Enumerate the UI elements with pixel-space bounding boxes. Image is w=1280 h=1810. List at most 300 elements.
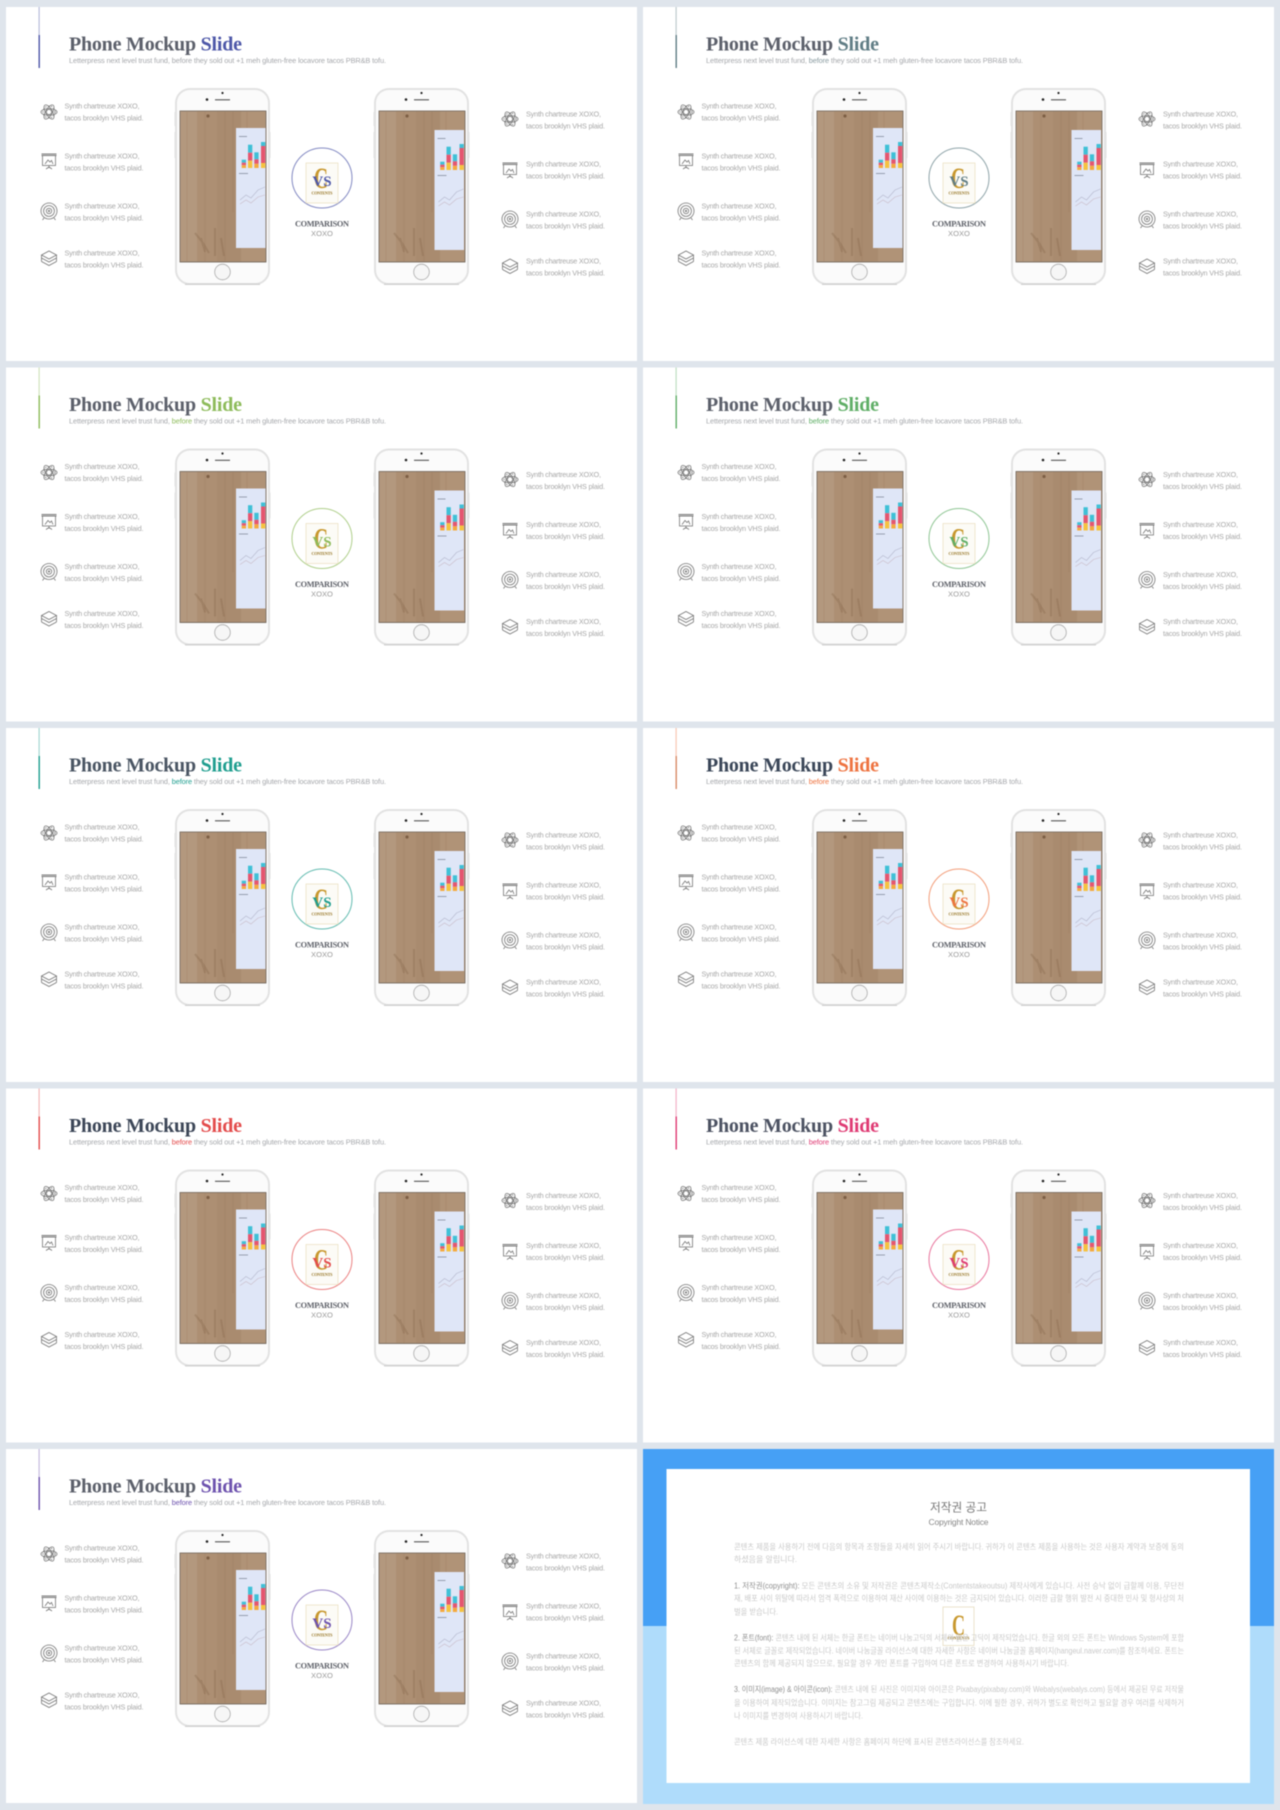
right list item 1: Synth chartreuse XOXO,: [526, 110, 601, 118]
left list item 2: tacos brooklyn VHS plaid.: [64, 1245, 144, 1254]
right list item 3: [1139, 570, 1242, 591]
left list item 3: [41, 1283, 144, 1304]
left list item 3: Synth chartreuse XOXO,: [702, 202, 776, 210]
right list item 1: Synth chartreuse XOXO,: [1163, 830, 1238, 840]
left list item 2: Synth chartreuse XOXO,: [702, 1233, 776, 1242]
VS badge: CONTENTS: [312, 551, 333, 556]
title: Phone Mockup Slide: [706, 394, 879, 416]
right list item 4: [502, 1338, 605, 1359]
right list item 2: Synth chartreuse XOXO,: [526, 1602, 601, 1610]
panel: copyright notice: [643, 1449, 1274, 1804]
left list item 4: Synth chartreuse XOXO,: [64, 609, 140, 618]
comparison label: XOXO: [311, 590, 333, 598]
VS badge: VS: [949, 174, 969, 190]
title: Phone Mockup Slide: [69, 1115, 242, 1137]
panel: slide 1 indigo: [6, 7, 637, 361]
comparison label: [932, 580, 986, 598]
left list item 1: [41, 462, 144, 483]
VS badge: [929, 148, 989, 208]
intro paragraph: [734, 1542, 1184, 1564]
VS badge: VS: [312, 1256, 332, 1272]
left list item 3: tacos brooklyn VHS plaid.: [64, 1295, 144, 1304]
left list item 2: [42, 1594, 144, 1614]
right list item 1: tacos brooklyn VHS plaid.: [526, 842, 605, 852]
right list item 2: tacos brooklyn VHS plaid.: [1163, 1253, 1242, 1262]
left list item 4: [678, 248, 780, 270]
right list item 2: Synth chartreuse XOXO,: [1163, 160, 1238, 168]
VS badge: [292, 1590, 352, 1650]
right list item 2: Synth chartreuse XOXO,: [1163, 520, 1238, 529]
comparison label: XOXO: [948, 590, 970, 598]
left phone: [811, 89, 908, 285]
comparison label: [295, 1301, 349, 1320]
left list item 1: [678, 462, 780, 483]
left list item 2: [678, 872, 780, 894]
right list item 4: Synth chartreuse XOXO,: [1163, 256, 1238, 266]
VS badge: C: [314, 883, 328, 916]
subtitle: Letterpress next level trust fund, before they sold out +1 meh gluten-free locavore tacos PBR&B tofu.: [706, 777, 1023, 786]
right list item 2: tacos brooklyn VHS plaid.: [526, 892, 605, 902]
left phone: [174, 1531, 271, 1727]
right list item 3: tacos brooklyn VHS plaid.: [526, 222, 605, 230]
comparison label: COMPARISON: [932, 580, 986, 589]
right list item 2: tacos brooklyn VHS plaid.: [1163, 172, 1242, 180]
left list item 3: tacos brooklyn VHS plaid.: [64, 574, 144, 583]
right list item 1: [502, 1552, 605, 1572]
accent bar: [676, 7, 677, 68]
left list item 1: [41, 822, 144, 844]
right list item 3: Synth chartreuse XOXO,: [1163, 1291, 1238, 1300]
section 3: image and icon: [734, 1684, 1184, 1720]
panel: slide 4 green: [643, 368, 1274, 722]
left list item 4: [42, 609, 144, 630]
left list item 3: Synth chartreuse XOXO,: [64, 562, 140, 571]
right list item 3: tacos brooklyn VHS plaid.: [1163, 582, 1242, 591]
left list item 3: Synth chartreuse XOXO,: [64, 1644, 140, 1652]
right list item 3: Synth chartreuse XOXO,: [526, 930, 601, 940]
right list item 4: [1140, 1338, 1242, 1359]
left list item 2: [42, 152, 144, 172]
comparison label: [295, 220, 349, 238]
left list item 4: tacos brooklyn VHS plaid.: [702, 982, 780, 990]
right list item 1: tacos brooklyn VHS plaid.: [526, 1203, 605, 1212]
right list item 4: tacos brooklyn VHS plaid.: [1163, 629, 1242, 638]
right list item 3: tacos brooklyn VHS plaid.: [1163, 942, 1242, 952]
left list item 2: tacos brooklyn VHS plaid.: [64, 524, 144, 533]
right list item 1: [502, 1191, 605, 1212]
right list item 4: [502, 1698, 605, 1720]
left list item 3: [41, 202, 144, 222]
left list item 4: [678, 609, 780, 630]
right list item 4: tacos brooklyn VHS plaid.: [1163, 268, 1242, 278]
right list item 2: tacos brooklyn VHS plaid.: [526, 1253, 605, 1262]
left phone: [811, 450, 908, 646]
title: Phone Mockup Slide: [706, 34, 879, 56]
left list item 3: [41, 922, 144, 944]
left list item 1: [678, 102, 780, 122]
comparison label: [932, 940, 986, 959]
section 3: image and icon: 3. 이미지(image) & 아이콘(icon): 콘텐츠 내에 된 사진은 이미지와 아이콘은 Pixabay(pixabay.com)와 Webalys(webalys.com) 등에서 제공된 무료 저작물: [734, 1684, 1184, 1694]
VS badge: [292, 148, 352, 208]
right list item 4: tacos brooklyn VHS plaid.: [526, 1350, 605, 1359]
VS badge: CONTENTS: [948, 190, 970, 196]
left list item 3: [41, 562, 144, 583]
right list item 3: [502, 210, 605, 230]
left list item 2: [678, 152, 780, 172]
left phone: [174, 89, 271, 285]
VS badge: [929, 508, 989, 568]
comparison label: XOXO: [948, 1310, 970, 1320]
right list item 1: tacos brooklyn VHS plaid.: [526, 122, 605, 130]
right list item 2: [1140, 160, 1242, 180]
right list item 4: [502, 256, 605, 278]
comparison label: COMPARISON: [932, 940, 986, 950]
comparison label: COMPARISON: [295, 940, 349, 950]
logo: C mark: C: [952, 1609, 965, 1642]
left list item 4: Synth chartreuse XOXO,: [64, 248, 140, 258]
left list item 2: Synth chartreuse XOXO,: [702, 872, 776, 882]
VS badge: VS: [312, 174, 332, 190]
left list item 3: [678, 562, 780, 583]
comparison label: [295, 1662, 349, 1680]
comparison label: COMPARISON: [295, 220, 349, 228]
left list item 1: Synth chartreuse XOXO,: [702, 102, 776, 110]
VS badge: CONTENTS: [948, 1272, 970, 1277]
logo: C mark: CONTENTS: [948, 1636, 970, 1640]
right list item 1: tacos brooklyn VHS plaid.: [526, 1564, 605, 1572]
left list item 3: tacos brooklyn VHS plaid.: [64, 1656, 144, 1664]
right list item 1: Synth chartreuse XOXO,: [1163, 470, 1238, 479]
comparison label: XOXO: [311, 950, 333, 959]
title: Phone Mockup Slide: [706, 754, 879, 776]
right list item 4: Synth chartreuse XOXO,: [1163, 978, 1238, 986]
left list item 4: tacos brooklyn VHS plaid.: [702, 260, 780, 270]
left list item 2: Synth chartreuse XOXO,: [64, 1594, 140, 1602]
right list item 1: [502, 470, 605, 491]
left list item 1: Synth chartreuse XOXO,: [702, 462, 776, 471]
right list item 3: tacos brooklyn VHS plaid.: [1163, 222, 1242, 230]
right list item 1: [1139, 110, 1242, 130]
left list item 4: tacos brooklyn VHS plaid.: [64, 1342, 144, 1351]
subtitle: Letterpress next level trust fund, before they sold out +1 meh gluten-free locavore tacos PBR&B tofu.: [706, 416, 1023, 426]
comparison label: XOXO: [948, 950, 970, 959]
right list item 4: [1140, 978, 1242, 998]
VS badge: C: [314, 1244, 328, 1276]
left list item 3: Synth chartreuse XOXO,: [702, 922, 776, 932]
right list item 1: Synth chartreuse XOXO,: [526, 1552, 601, 1560]
right list item 2: Synth chartreuse XOXO,: [526, 880, 601, 890]
right list item 4: tacos brooklyn VHS plaid.: [526, 629, 605, 638]
left list item 1: Synth chartreuse XOXO,: [702, 822, 776, 832]
VS badge: C: [951, 1244, 965, 1276]
left list item 1: Synth chartreuse XOXO,: [702, 1183, 776, 1192]
right phone: [373, 1531, 470, 1727]
left list item 4: Synth chartreuse XOXO,: [702, 970, 776, 978]
VS badge: VS: [312, 534, 332, 550]
left phone: [811, 1170, 908, 1366]
comparison label: COMPARISON: [932, 220, 986, 228]
VS badge: VS: [949, 534, 969, 550]
intro paragraph: 콘텐츠 제품을 사용하기 전에 다음의 항목과 조항들을 자세히 읽어 주시기 바랍니다. 귀하가 이 콘텐츠 제품을 사용하는 것은 사용자 계약과 보증에 동의: [734, 1542, 1184, 1552]
left list item 2: Synth chartreuse XOXO,: [64, 512, 140, 521]
accent bar: [676, 368, 677, 428]
panel: slide 7 red: [6, 1088, 637, 1442]
right list item 4: Synth chartreuse XOXO,: [526, 256, 601, 266]
title: Phone Mockup Slide: [69, 754, 242, 776]
right list item 3: [1139, 1291, 1242, 1312]
left list item 1: Synth chartreuse XOXO,: [64, 1544, 140, 1552]
left list item 3: tacos brooklyn VHS plaid.: [702, 214, 780, 222]
left list item 1: Synth chartreuse XOXO,: [64, 102, 140, 110]
left list item 1: Synth chartreuse XOXO,: [64, 462, 140, 471]
left list item 2: Synth chartreuse XOXO,: [702, 512, 776, 521]
left list item 1: tacos brooklyn VHS plaid.: [64, 114, 144, 122]
right list item 1: Synth chartreuse XOXO,: [1163, 1191, 1238, 1200]
panel: slide 3 lime: [6, 368, 637, 722]
comparison label: [932, 220, 986, 238]
right list item 4: [1140, 617, 1242, 638]
left list item 2: tacos brooklyn VHS plaid.: [702, 884, 780, 894]
panel: slide 6 orange: [643, 728, 1274, 1082]
right list item 1: [502, 830, 605, 852]
right list item 2: Synth chartreuse XOXO,: [526, 160, 601, 168]
left list item 1: [41, 102, 144, 122]
right list item 4: Synth chartreuse XOXO,: [526, 1338, 601, 1347]
VS badge: [292, 869, 352, 929]
section 1: copyright: 재, 배포 사이 위탈에 따라서 엄격 폭력으로 이용하여 재산 사이에 이용하는 것은 금지되어 있습니다. 이러한 급할 행위 발전 시 중대한 민사 및 형사상의 처: [734, 1593, 1184, 1603]
left list item 3: tacos brooklyn VHS plaid.: [64, 934, 144, 944]
right list item 3: [1139, 210, 1242, 230]
VS badge: CONTENTS: [312, 912, 333, 916]
logo: C mark: [943, 1607, 974, 1646]
comparison label: [295, 940, 349, 959]
right list item 4: Synth chartreuse XOXO,: [526, 617, 601, 626]
section 3: image and icon: 나 이미지를 변경하여 사용하시기 바랍니다.: [734, 1710, 863, 1720]
left list item 4: tacos brooklyn VHS plaid.: [64, 982, 144, 990]
right list item 2: [1140, 880, 1242, 902]
right list item 2: [502, 160, 605, 180]
right list item 3: Synth chartreuse XOXO,: [526, 1291, 601, 1300]
panel: slide 5 teal: [6, 728, 637, 1082]
VS badge: [292, 508, 352, 568]
left list item 3: Synth chartreuse XOXO,: [64, 202, 140, 210]
left list item 3: Synth chartreuse XOXO,: [702, 1283, 776, 1292]
right list item 3: Synth chartreuse XOXO,: [1163, 210, 1238, 218]
right phone: [1010, 810, 1107, 1006]
right list item 3: Synth chartreuse XOXO,: [1163, 930, 1238, 940]
right list item 4: Synth chartreuse XOXO,: [1163, 617, 1238, 626]
right list item 3: [502, 930, 605, 952]
right list item 1: [502, 110, 605, 130]
subtitle: Letterpress next level trust fund, before they sold out +1 meh gluten-free locavore tacos PBR&B tofu.: [69, 416, 386, 426]
right phone: [1010, 450, 1107, 646]
right list item 3: [502, 1291, 605, 1312]
section 2: font: 된 서체로 글꼴로 제작되었습니다. 네이버 나눔글꼴 라이선스에 대한 자세한 사항은 네이버 나눔글꼴 홈페이지(hangeul.naver.com)를 참조하세요. 폰트는: [734, 1646, 1184, 1656]
VS badge: C: [951, 883, 965, 916]
right list item 2: Synth chartreuse XOXO,: [526, 1241, 601, 1250]
right list item 3: Synth chartreuse XOXO,: [526, 210, 601, 218]
left list item 2: tacos brooklyn VHS plaid.: [702, 164, 780, 172]
right list item 3: Synth chartreuse XOXO,: [1163, 570, 1238, 579]
left list item 4: tacos brooklyn VHS plaid.: [702, 621, 780, 630]
right list item 3: tacos brooklyn VHS plaid.: [526, 1303, 605, 1312]
right list item 2: Synth chartreuse XOXO,: [526, 520, 601, 529]
left phone: [174, 450, 271, 646]
section 1: copyright: 1. 저작권(copyright): 모든 콘텐츠의 소유 및 저작권은 콘텐츠제작소(Contentstakeoutsu) 제작사에게 있습니다. 사전 승낙 없이 급할께 이용, 무단전: [734, 1580, 1184, 1590]
comparison label: XOXO: [311, 229, 333, 238]
right list item 3: [1139, 930, 1242, 952]
right list item 3: tacos brooklyn VHS plaid.: [526, 942, 605, 952]
panel: slide 8 pink: [643, 1088, 1274, 1442]
comparison label: XOXO: [311, 1310, 333, 1320]
right list item 4: [502, 978, 605, 998]
left list item 4: tacos brooklyn VHS plaid.: [64, 260, 144, 270]
right list item 1: [1139, 1191, 1242, 1212]
closing note: 콘텐츠 제품 라이선스에 대한 자세한 사항은 홈페이지 하단에 표시된 콘텐츠라이선스를 참조하세요.: [734, 1736, 1024, 1746]
left list item 3: tacos brooklyn VHS plaid.: [702, 934, 780, 944]
left list item 3: tacos brooklyn VHS plaid.: [702, 574, 780, 583]
right list item 2: tacos brooklyn VHS plaid.: [526, 1614, 605, 1622]
title: Phone Mockup Slide: [69, 394, 242, 416]
left list item 1: tacos brooklyn VHS plaid.: [702, 834, 780, 844]
left list item 2: Synth chartreuse XOXO,: [64, 1233, 140, 1242]
subtitle: Letterpress next level trust fund, before they sold out +1 meh gluten-free locavore tacos PBR&B tofu.: [69, 1498, 386, 1507]
right list item 2: tacos brooklyn VHS plaid.: [1163, 892, 1242, 902]
left list item 2: Synth chartreuse XOXO,: [702, 152, 776, 160]
comparison label: COMPARISON: [295, 1301, 349, 1310]
left list item 2: tacos brooklyn VHS plaid.: [64, 1606, 144, 1614]
right list item 3: Synth chartreuse XOXO,: [526, 570, 601, 579]
right list item 4: tacos brooklyn VHS plaid.: [526, 268, 605, 278]
accent bar: [38, 368, 40, 428]
right phone: [373, 810, 470, 1006]
right list item 4: [502, 617, 605, 638]
right list item 1: [1139, 470, 1242, 491]
left list item 2: [42, 872, 144, 894]
VS badge: C: [314, 1604, 328, 1637]
accent bar: [38, 728, 40, 789]
right phone: [373, 89, 470, 285]
right list item 2: tacos brooklyn VHS plaid.: [526, 172, 605, 180]
comparison label: COMPARISON: [932, 1301, 986, 1310]
subtitle: Letterpress next level trust fund, before they sold out +1 meh gluten-free locavore tacos PBR&B tofu.: [69, 56, 386, 65]
comparison label: COMPARISON: [295, 1662, 349, 1670]
right list item 4: tacos brooklyn VHS plaid.: [1163, 990, 1242, 998]
subtitle: Letterpress next level trust fund, before they sold out +1 meh gluten-free locavore tacos PBR&B tofu.: [706, 56, 1023, 65]
right list item 3: [502, 570, 605, 591]
left list item 1: tacos brooklyn VHS plaid.: [64, 1195, 144, 1204]
right list item 1: tacos brooklyn VHS plaid.: [526, 482, 605, 491]
left list item 4: Synth chartreuse XOXO,: [702, 609, 776, 618]
comparison label: XOXO: [948, 229, 970, 238]
left list item 2: tacos brooklyn VHS plaid.: [64, 884, 144, 894]
right list item 3: tacos brooklyn VHS plaid.: [526, 582, 605, 591]
title: Phone Mockup Slide: [69, 34, 242, 56]
section 2: font: [734, 1632, 1185, 1668]
left list item 1: Synth chartreuse XOXO,: [64, 822, 140, 832]
left list item 2: [678, 1233, 780, 1254]
right phone: [373, 1170, 470, 1366]
section 1: copyright: 벌을 받습니다.: [734, 1606, 778, 1616]
intro paragraph: 하셨음을 알립니다.: [734, 1554, 797, 1564]
left list item 1: tacos brooklyn VHS plaid.: [64, 1556, 144, 1564]
left list item 4: [678, 1330, 780, 1351]
VS badge: C: [951, 522, 965, 556]
right list item 4: tacos brooklyn VHS plaid.: [526, 1710, 605, 1720]
VS badge: CONTENTS: [312, 1272, 333, 1277]
left list item 1: tacos brooklyn VHS plaid.: [702, 474, 780, 483]
left phone: [174, 1170, 271, 1366]
accent bar: [38, 1088, 40, 1150]
right list item 1: tacos brooklyn VHS plaid.: [1163, 1203, 1242, 1212]
VS badge: [292, 1230, 352, 1290]
VS badge: C: [951, 162, 965, 195]
left list item 3: [678, 202, 780, 222]
left list item 1: [678, 1183, 780, 1204]
left list item 1: [41, 1544, 144, 1564]
left list item 2: [42, 512, 144, 533]
right list item 4: Synth chartreuse XOXO,: [1163, 1338, 1238, 1347]
left list item 2: tacos brooklyn VHS plaid.: [64, 164, 144, 172]
left list item 1: [678, 822, 780, 844]
right list item 3: Synth chartreuse XOXO,: [526, 1652, 601, 1660]
left list item 4: [42, 1330, 144, 1351]
title: Phone Mockup Slide: [69, 1476, 242, 1498]
left list item 1: tacos brooklyn VHS plaid.: [64, 474, 144, 483]
VS badge: VS: [312, 895, 332, 911]
left list item 3: Synth chartreuse XOXO,: [702, 562, 776, 571]
right list item 1: Synth chartreuse XOXO,: [526, 1191, 601, 1200]
right list item 1: tacos brooklyn VHS plaid.: [1163, 482, 1242, 491]
right list item 2: [502, 1602, 605, 1622]
left list item 4: [678, 970, 780, 990]
right list item 1: Synth chartreuse XOXO,: [526, 830, 601, 840]
VS badge: CONTENTS: [312, 1632, 333, 1638]
left list item 1: tacos brooklyn VHS plaid.: [702, 1195, 780, 1204]
left list item 3: tacos brooklyn VHS plaid.: [64, 214, 144, 222]
subtitle: Letterpress next level trust fund, before they sold out +1 meh gluten-free locavore tacos PBR&B tofu.: [69, 1138, 386, 1146]
right phone: [1010, 1170, 1107, 1366]
left list item 1: tacos brooklyn VHS plaid.: [64, 834, 144, 844]
left list item 4: [42, 970, 144, 990]
VS badge: CONTENTS: [948, 551, 970, 556]
left phone: [174, 810, 271, 1006]
left list item 2: Synth chartreuse XOXO,: [64, 152, 140, 160]
left list item 2: [42, 1233, 144, 1254]
right list item 2: [502, 880, 605, 902]
VS badge: VS: [312, 1616, 332, 1632]
VS badge: VS: [949, 1256, 969, 1272]
left list item 4: Synth chartreuse XOXO,: [702, 1330, 776, 1339]
VS badge: CONTENTS: [312, 190, 333, 196]
right list item 4: tacos brooklyn VHS plaid.: [526, 990, 605, 998]
VS badge: C: [314, 162, 328, 195]
left list item 3: [678, 922, 780, 944]
left list item 1: tacos brooklyn VHS plaid.: [702, 114, 780, 122]
right list item 3: [502, 1652, 605, 1672]
right list item 1: tacos brooklyn VHS plaid.: [1163, 842, 1242, 852]
left list item 4: Synth chartreuse XOXO,: [64, 1690, 140, 1700]
left list item 4: tacos brooklyn VHS plaid.: [64, 1702, 144, 1712]
left list item 2: tacos brooklyn VHS plaid.: [702, 1245, 780, 1254]
left list item 3: Synth chartreuse XOXO,: [64, 922, 140, 932]
section 2: font: 콘텐츠의 함께 제공되지 않으므로, 필요할 경우 개인 폰트를 구입하여 다른 폰트로 변경하여 사용하시기 바랍니다.: [734, 1658, 1069, 1668]
right list item 2: [502, 1241, 605, 1262]
left list item 4: Synth chartreuse XOXO,: [64, 1330, 140, 1339]
notice heading: 저작권 공고: [930, 1502, 987, 1514]
panel: slide 9 purple: [6, 1449, 637, 1803]
section 1: copyright: [734, 1580, 1184, 1616]
